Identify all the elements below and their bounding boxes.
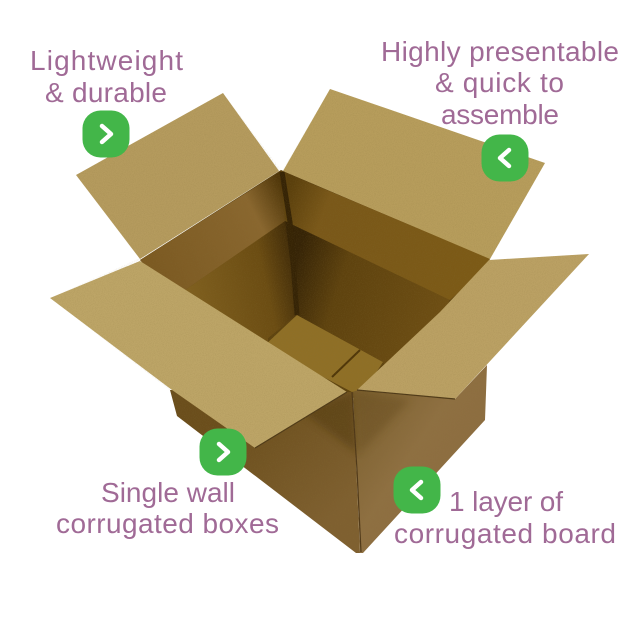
back right flap <box>283 89 545 259</box>
interior right wall upper band <box>281 171 490 300</box>
label text: Lightweight <box>30 45 183 76</box>
icon: green right chevron badge <box>82 110 130 158</box>
interior left wall upper band <box>140 171 285 292</box>
label text: Single wall <box>101 477 235 508</box>
label text: 1 layer of <box>449 486 563 517</box>
interior base <box>140 170 490 400</box>
label text second line: & quick to <box>435 67 564 98</box>
interior floor <box>264 315 383 392</box>
right flap <box>357 254 589 399</box>
label text second line: corrugated board <box>394 518 616 549</box>
flap edge shadow <box>255 390 455 448</box>
front left flap <box>50 261 347 448</box>
icon: green left chevron badge <box>482 134 528 182</box>
callout: one layer of corrugated board <box>394 486 616 549</box>
icon: green right chevron badge <box>200 428 246 476</box>
floor seam <box>332 350 360 377</box>
box outer left side <box>170 390 360 553</box>
interior corner shadow <box>282 172 297 315</box>
label text second line: corrugated boxes <box>56 508 279 539</box>
label text second line: & durable <box>45 77 167 108</box>
callout: highly presentable <box>381 36 619 130</box>
icon: green left chevron badge <box>394 466 440 514</box>
label text third line: assemble <box>441 99 559 130</box>
callout: lightweight and durable <box>30 45 183 108</box>
interior right wall lower <box>285 221 450 370</box>
box corner crease <box>352 392 361 552</box>
interior left wall lower <box>182 221 297 346</box>
back left flap <box>76 93 279 259</box>
illustration: open cardboard box <box>40 80 600 560</box>
cardboard grain <box>58 90 571 530</box>
outer crease shading <box>308 393 404 452</box>
callout: single wall corrugated boxes <box>56 477 279 539</box>
box outer right side <box>353 365 487 553</box>
label text: Highly presentable <box>381 36 619 67</box>
